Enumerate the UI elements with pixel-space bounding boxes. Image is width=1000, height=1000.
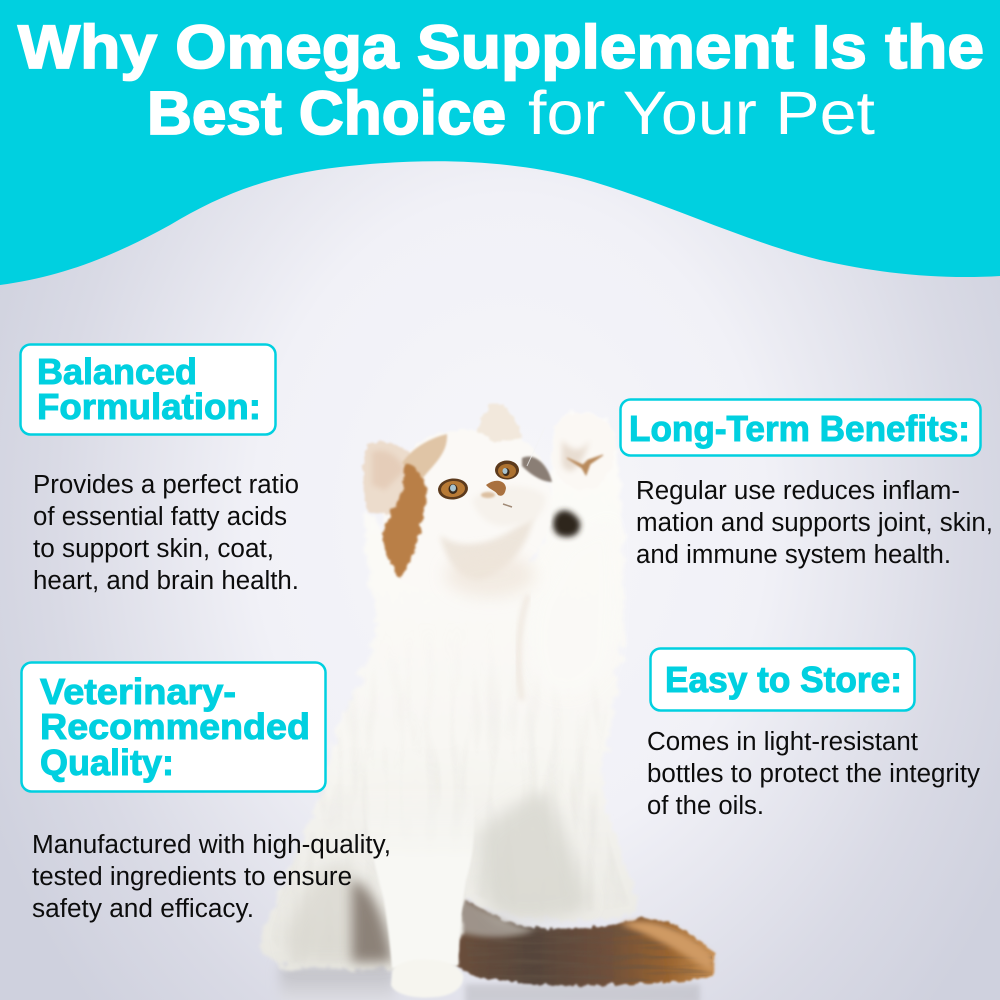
raised paw bbox=[552, 413, 615, 490]
heading: Veterinary- bbox=[40, 671, 236, 712]
pale ginger forehead patch bbox=[402, 434, 447, 482]
body text bbox=[636, 477, 993, 569]
body text: Comes in light-resistant bbox=[647, 728, 918, 756]
panel: veterinary-recommended quality bbox=[22, 662, 391, 923]
title: for Your Pet bbox=[528, 79, 875, 147]
arm and chest separation bbox=[519, 595, 528, 700]
ginger cheek patch bbox=[383, 463, 426, 578]
muzzle freckle bbox=[481, 492, 495, 498]
title: Best Choice bbox=[147, 79, 506, 147]
body text: Provides a perfect ratio bbox=[33, 471, 299, 499]
body shading, rear haunch bbox=[285, 864, 392, 962]
front leg bbox=[364, 790, 474, 968]
paw toes bbox=[567, 455, 603, 475]
body text: bottles to protect the integrity bbox=[647, 760, 980, 788]
body text: tested ingredients to ensure bbox=[32, 863, 352, 891]
heading: Balanced bbox=[37, 351, 197, 392]
body text: Regular use reduces inflam- bbox=[636, 477, 960, 505]
body text: heart, and brain health. bbox=[33, 567, 299, 595]
body text: of the oils. bbox=[647, 792, 764, 820]
raised arm highlight bbox=[530, 520, 616, 696]
right eye bbox=[495, 460, 519, 480]
muzzle bbox=[472, 486, 545, 526]
right ear bbox=[477, 403, 522, 442]
body text bbox=[33, 471, 299, 595]
heading: Recommended bbox=[40, 706, 310, 747]
heading box bbox=[22, 662, 326, 792]
whisker bbox=[527, 427, 545, 466]
nose bbox=[486, 481, 506, 496]
title: Why Omega Supplement Is the bbox=[18, 13, 984, 81]
mouth bbox=[503, 504, 512, 507]
dark patch by right eye bbox=[522, 457, 552, 482]
cat tail bbox=[455, 895, 714, 986]
panel: long-term benefits bbox=[620, 400, 993, 569]
heading box bbox=[620, 400, 980, 456]
chest and chin shading bbox=[440, 510, 535, 597]
heading box bbox=[20, 344, 276, 434]
heading box bbox=[650, 648, 914, 710]
body text: mation and supports joint, skin, bbox=[636, 509, 993, 537]
heading: Quality: bbox=[40, 742, 174, 783]
panel: balanced formulation bbox=[20, 344, 299, 595]
front paw bbox=[391, 960, 463, 998]
illustration: white and ginger cat bbox=[261, 403, 714, 1000]
body text bbox=[32, 831, 391, 923]
body text bbox=[647, 728, 980, 820]
paw shading bbox=[562, 440, 590, 471]
body text: safety and efficacy. bbox=[32, 895, 254, 923]
body text: to support skin, coat, bbox=[33, 535, 274, 563]
fur texture bbox=[270, 570, 630, 962]
left eye bbox=[437, 477, 469, 501]
heading bbox=[40, 671, 310, 783]
teal wave header bbox=[0, 0, 1000, 285]
dark armpit patch bbox=[553, 510, 580, 537]
body text: of essential fatty acids bbox=[33, 503, 287, 531]
left ear bbox=[363, 442, 425, 515]
title bbox=[18, 13, 984, 147]
heading: Easy to Store: bbox=[665, 659, 902, 700]
heading: Formulation: bbox=[37, 386, 261, 427]
heading: Long-Term Benefits: bbox=[629, 408, 970, 449]
heading bbox=[37, 351, 261, 427]
panel: easy to store bbox=[647, 648, 980, 820]
cat head bbox=[383, 429, 552, 596]
body shading, right of front leg bbox=[478, 790, 590, 920]
cat body bbox=[261, 412, 642, 968]
body text: and immune system health. bbox=[636, 541, 951, 569]
body text: Manufactured with high-quality, bbox=[32, 831, 391, 859]
floor shadow under cat bbox=[280, 966, 700, 1000]
